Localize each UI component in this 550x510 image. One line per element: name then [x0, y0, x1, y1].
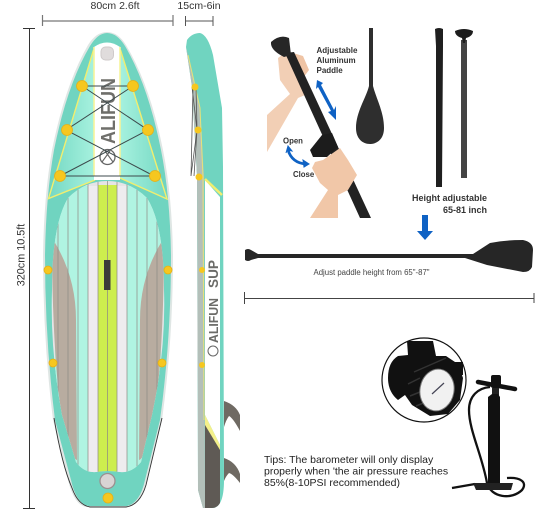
tips text: Tips: The barometer will only display [264, 454, 434, 466]
right tube [454, 362, 463, 375]
adjustable aluminum paddle label: Aluminum [316, 56, 356, 65]
ALIFUN logo: ALIFUN [98, 78, 120, 144]
tips text: 85%(8-10PSI recommended) [264, 477, 400, 489]
adjustable aluminum paddle label: Adjustable [316, 46, 358, 55]
width dimension: 80cm [42, 0, 173, 26]
paddle height caption: Adjust paddle height from 65"-87" [314, 268, 430, 277]
bungee cords [60, 86, 154, 176]
yellow tail wedge [205, 415, 220, 452]
height adjustable label: Height adjustable [412, 193, 487, 203]
deck handle [104, 260, 110, 290]
board outline [43, 32, 173, 507]
rotate arrow [288, 150, 306, 164]
clamp [310, 133, 338, 157]
assembled paddle [245, 240, 533, 272]
gauge face [417, 366, 457, 414]
mint stripes [55, 186, 88, 476]
yellow deck lines [48, 50, 167, 199]
grey tail panel [205, 425, 220, 510]
height adjustable label: 65-81 inch [443, 205, 487, 215]
width dimension: 80cm: 80cm 2.6ft [90, 0, 140, 12]
upper fingers [293, 53, 309, 78]
side anchors [192, 84, 205, 368]
tips text: properly when 'the air pressure reaches [264, 466, 448, 478]
traction pad [52, 180, 164, 480]
side bungee [191, 87, 197, 176]
close label: Close [293, 170, 315, 179]
adjustable aluminum paddle label: Paddle [316, 66, 343, 75]
board top view [43, 32, 173, 507]
pump knob [491, 375, 501, 388]
length dimension: 320cm: 320cm 10.5ft [16, 224, 28, 286]
bow deck panel left [48, 50, 94, 198]
down arrow [417, 215, 433, 240]
pump body in gauge [388, 341, 463, 416]
grey left rail [186, 47, 205, 508]
lime centre stripe [98, 185, 117, 475]
tan side pads [52, 238, 77, 460]
tail valve [100, 474, 115, 488]
teal rail [45, 33, 171, 506]
gauge needle [432, 383, 444, 394]
side logo [208, 346, 218, 356]
nose valve [101, 47, 114, 60]
pump base [473, 483, 513, 490]
lower hand [310, 148, 357, 218]
yellow rail line [188, 55, 204, 420]
pressure gauge callout [382, 338, 466, 422]
paddle demo: hands and shaft [267, 37, 371, 218]
pump hose [469, 387, 524, 496]
side anchors [44, 266, 172, 503]
thickness dimension: 15cm: 15cm-6in [177, 0, 221, 12]
hand pump [452, 375, 524, 496]
adjust arrow [316, 80, 336, 120]
yellow bungee anchors [54, 80, 160, 182]
pump collar [492, 388, 499, 397]
paddle length line [244, 292, 534, 304]
side body [186, 33, 224, 508]
paddle shaft sections [435, 28, 473, 187]
tail shadow [54, 418, 162, 507]
paddle shaft [285, 52, 371, 218]
white side panel [205, 180, 220, 445]
pump handle [478, 382, 515, 389]
length dimension: 320cm [16, 28, 35, 509]
T handle [271, 37, 291, 57]
knurled ribs [408, 358, 446, 406]
fins [224, 401, 240, 483]
open label: Open [283, 136, 303, 146]
rotate arrow heads [286, 146, 309, 167]
pump shaft [488, 394, 500, 483]
white centre stripe [94, 42, 120, 180]
upper arm and hand [267, 52, 305, 152]
side ALIFUN text: ALIFUN [206, 298, 221, 343]
thickness dimension: 15cm [177, 0, 221, 26]
pump hose to valve [452, 484, 475, 488]
bow deck panel right [120, 50, 167, 199]
side SUP text: SUP [205, 260, 221, 288]
blade [356, 28, 384, 144]
board side view [186, 33, 240, 510]
